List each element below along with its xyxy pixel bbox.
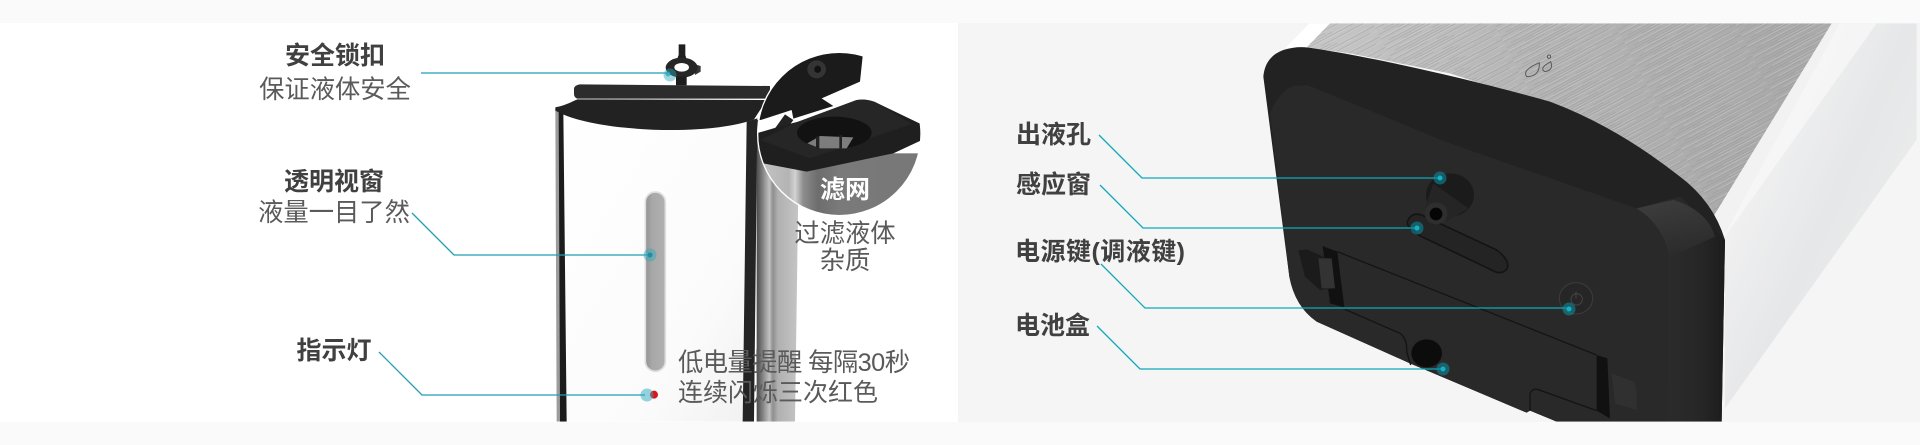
leader line bbox=[412, 213, 650, 255]
heading: 透明视窗 bbox=[284, 168, 384, 196]
heading: 安全锁扣 bbox=[285, 42, 385, 70]
brand droplets icon bbox=[1526, 55, 1552, 77]
callout: battery box bbox=[1015, 311, 1450, 376]
magnifier background bbox=[758, 120, 800, 133]
left clip recess bbox=[1298, 249, 1333, 290]
heading: 滤网 bbox=[820, 176, 870, 204]
callout: filter mesh bbox=[794, 176, 896, 275]
callout: outlet bbox=[1016, 121, 1446, 184]
description: 连续闪烁三次红色 bbox=[678, 379, 878, 407]
description: 过滤液体 bbox=[794, 220, 896, 248]
heading: 电源键(调液键) bbox=[1015, 238, 1185, 266]
cap top surface bbox=[798, 100, 878, 122]
leader line bbox=[379, 352, 645, 395]
white strip at top left bbox=[1285, 23, 1330, 48]
lid lower shell bbox=[555, 99, 767, 130]
description bbox=[794, 220, 896, 275]
panel: right grey background bbox=[958, 23, 1920, 422]
magnifier: filter mesh bbox=[757, 50, 923, 217]
black underside shell bbox=[1263, 47, 1725, 422]
button disc bbox=[1559, 283, 1593, 314]
steel below the cap bbox=[757, 153, 923, 217]
leader line bbox=[1097, 326, 1441, 369]
left clip bbox=[1318, 258, 1335, 288]
nozzle cone bbox=[1425, 183, 1468, 222]
side face bbox=[1725, 23, 1920, 408]
lock stem bbox=[677, 44, 686, 58]
cap hole bbox=[797, 117, 872, 149]
hinge bbox=[775, 114, 793, 129]
battery cover outline bbox=[1337, 252, 1597, 411]
marker bbox=[1562, 302, 1576, 316]
indicator light bbox=[650, 391, 658, 399]
heading: 感应窗 bbox=[1016, 170, 1091, 199]
marker bbox=[644, 248, 656, 262]
sensor window bbox=[1407, 214, 1508, 273]
white highlight on corner bbox=[1713, 23, 1877, 237]
callout: sensor window bbox=[1016, 170, 1424, 234]
description: 杂质 bbox=[820, 247, 870, 275]
mesh bbox=[807, 136, 853, 148]
callout: safety lock bbox=[259, 42, 676, 104]
heading: 出液孔 bbox=[1016, 121, 1091, 149]
left dark edge bbox=[559, 111, 567, 422]
heading: 电池盒 bbox=[1015, 311, 1090, 340]
marker bbox=[664, 68, 676, 82]
right dark edge bbox=[743, 118, 757, 422]
marker bbox=[1434, 172, 1446, 184]
right battery latch bbox=[1597, 355, 1610, 418]
right rim highlight bbox=[1637, 200, 1715, 241]
leader line bbox=[1099, 135, 1438, 178]
description: 保证液体安全 bbox=[259, 76, 411, 104]
marker bbox=[640, 388, 654, 402]
lock ring bbox=[666, 58, 698, 78]
mesh bars bbox=[816, 135, 842, 149]
leader line bbox=[1101, 264, 1567, 308]
transparent window bbox=[645, 192, 665, 371]
nozzle base bbox=[1426, 173, 1474, 217]
left edge highlight bbox=[555, 109, 560, 422]
magnifier ring bbox=[758, 52, 921, 216]
lock base bbox=[676, 77, 687, 85]
description: 液量一目了然 bbox=[258, 199, 410, 227]
cap base bbox=[757, 100, 921, 172]
inner panel bbox=[1286, 256, 1668, 422]
open flap bbox=[757, 50, 863, 120]
steel side of dispenser bbox=[757, 120, 799, 422]
nozzle hole bbox=[1430, 208, 1442, 220]
product: dispenser underside view bbox=[1263, 23, 1920, 422]
nozzle bbox=[1425, 173, 1474, 224]
nozzle tip bbox=[1425, 202, 1447, 224]
left battery latch bbox=[1323, 246, 1344, 307]
icon: safety lock knob bbox=[666, 44, 701, 85]
power glyph bbox=[1571, 294, 1582, 305]
leader line bbox=[1100, 185, 1415, 228]
lock wing bbox=[694, 64, 701, 75]
callout: transparent window bbox=[258, 168, 656, 262]
front panel of dispenser bbox=[683, 324, 744, 422]
description bbox=[678, 349, 910, 407]
brushed texture bbox=[1308, 24, 1830, 213]
battery cover screw hole bbox=[1411, 339, 1442, 367]
callout: power key bbox=[1015, 238, 1576, 316]
callout: indicator light bbox=[296, 337, 910, 407]
flap screw hole bbox=[807, 60, 826, 78]
product: dispenser front view bbox=[555, 44, 923, 422]
panel: left white background bbox=[0, 23, 958, 422]
power button bbox=[1559, 283, 1593, 314]
lid top plate bbox=[574, 84, 770, 99]
marker bbox=[1436, 362, 1450, 376]
right rim bbox=[1651, 199, 1725, 422]
marker bbox=[1410, 222, 1424, 234]
description: 低电量提醒 每隔30秒 bbox=[678, 349, 910, 377]
leader line bbox=[421, 72, 668, 74]
heading: 指示灯 bbox=[296, 337, 372, 365]
lock hole bbox=[674, 63, 689, 72]
right clip bbox=[1612, 373, 1637, 410]
top steel face bbox=[1306, 24, 1832, 215]
